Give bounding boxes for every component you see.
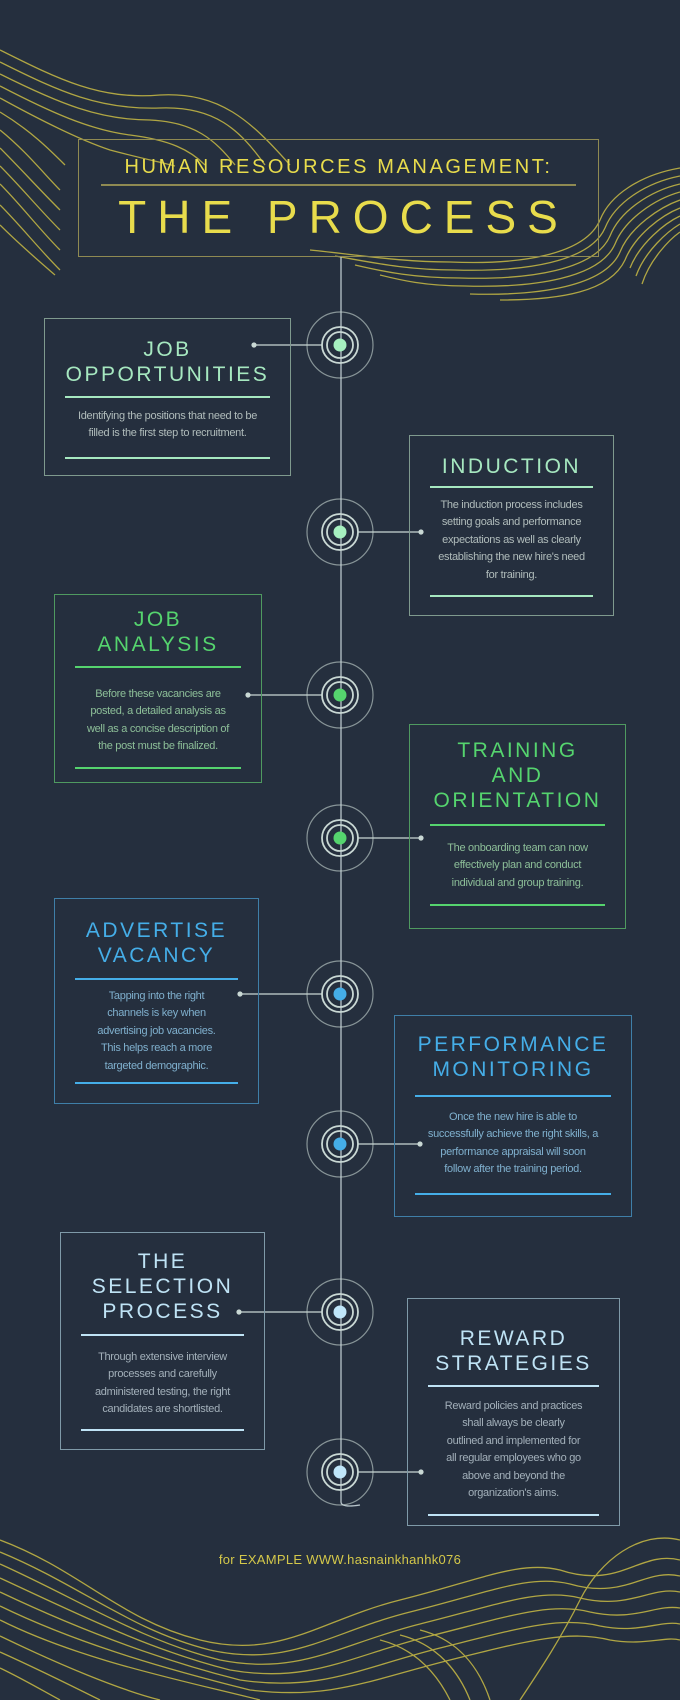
panel: performance monitoring: follow after the training period. <box>444 1163 582 1175</box>
panel: induction: INDUCTION <box>442 455 581 478</box>
panel: job opportunities: OPPORTUNITIES <box>66 363 269 386</box>
panel: training and orientation: individual and group training. <box>452 877 583 889</box>
panel: induction: establishing the new hire's need <box>438 551 585 563</box>
panel: advertise vacancy: VACANCY <box>98 944 215 967</box>
panel: reward strategies: above and beyond the <box>462 1470 565 1482</box>
panel: induction: for training. <box>486 569 537 581</box>
node 3 <box>246 662 373 728</box>
panel: advertise vacancy: channels is key when <box>107 1007 206 1019</box>
title box <box>78 139 599 257</box>
panel: performance monitoring: successfully achieve the right skills, a <box>428 1128 598 1140</box>
panel: advertise vacancy: Tapping into the right <box>109 990 204 1002</box>
panel: advertise vacancy: advertising job vacancies. <box>97 1025 216 1037</box>
node 1 <box>252 312 373 378</box>
panel: the selection process: Through extensive interview <box>98 1351 227 1363</box>
panel: job opportunities: JOB <box>143 338 192 361</box>
panel: job opportunities: filled is the first step to recruitment. <box>89 427 246 439</box>
panel: reward strategies: organization's aims. <box>468 1487 559 1499</box>
panel: advertise vacancy: targeted demographic. <box>105 1060 208 1072</box>
panel: reward strategies: all regular employees who go <box>446 1452 581 1464</box>
panel: training and orientation: The onboarding team can now <box>447 842 588 854</box>
node 7 <box>237 1279 373 1345</box>
panel: the selection process: administered testing, the right <box>95 1386 230 1398</box>
node 4 <box>307 805 423 871</box>
panel: induction <box>409 435 614 616</box>
panel: training and orientation <box>409 724 626 929</box>
node 8 <box>307 1439 423 1505</box>
panel: job analysis: the post must be finalized. <box>98 740 218 752</box>
panel: reward strategies: STRATEGIES <box>435 1352 592 1375</box>
panel: job analysis: Before these vacancies are <box>95 688 221 700</box>
panel: job analysis: posted, a detailed analysis as <box>90 705 226 717</box>
subtitle: HUMAN RESOURCES MANAGEMENT: <box>124 156 552 178</box>
panel: the selection process: THE <box>138 1250 187 1273</box>
panel: performance monitoring <box>394 1015 632 1217</box>
panel: induction: expectations as well as clearly <box>442 534 581 546</box>
panel: the selection process: SELECTION <box>92 1275 233 1298</box>
panel: training and orientation: effectively plan and conduct <box>454 859 581 871</box>
panel: advertise vacancy <box>54 898 259 1104</box>
panel: training and orientation: ORIENTATION <box>434 789 601 812</box>
panel: performance monitoring: MONITORING <box>432 1058 594 1081</box>
panel: job analysis <box>54 594 262 783</box>
panel: induction: setting goals and performance <box>442 516 581 528</box>
panel: the selection process <box>60 1232 265 1450</box>
panel: reward strategies <box>407 1298 620 1526</box>
node 5 <box>238 961 373 1027</box>
panel: performance monitoring: Once the new hire is able to <box>449 1111 577 1123</box>
panel: advertise vacancy: ADVERTISE <box>86 919 227 942</box>
node 6 <box>307 1111 422 1177</box>
panel: reward strategies: outlined and implemented for <box>447 1435 580 1447</box>
panel: performance monitoring: performance appraisal will soon <box>440 1146 586 1158</box>
panel: reward strategies: shall always be clearly <box>462 1417 565 1429</box>
panel: the selection process: candidates are shortlisted. <box>102 1403 223 1415</box>
panel: induction: The induction process includes <box>440 499 583 511</box>
panel: the selection process: PROCESS <box>102 1300 223 1323</box>
panel: job opportunities: Identifying the positions that need to be <box>78 410 257 422</box>
panel: training and orientation: TRAINING <box>457 739 578 762</box>
node 2 <box>307 499 423 565</box>
panel: advertise vacancy: This helps reach a more <box>101 1042 212 1054</box>
panel: reward strategies: Reward policies and practices <box>445 1400 582 1412</box>
panel: job analysis: well as a concise description of <box>87 723 229 735</box>
panel: job analysis: JOB <box>134 608 182 631</box>
panel: reward strategies: REWARD <box>460 1327 567 1350</box>
panel: performance monitoring: PERFORMANCE <box>418 1033 608 1056</box>
footer text: for EXAMPLE WWW.hasnainkhanhk076 <box>219 1552 461 1567</box>
panel: training and orientation: AND <box>492 764 543 787</box>
panel: job analysis: ANALYSIS <box>97 633 219 656</box>
panel: the selection process: processes and carefully <box>108 1368 217 1380</box>
panel: job opportunities <box>44 318 291 476</box>
main title: THE PROCESS <box>118 191 569 243</box>
